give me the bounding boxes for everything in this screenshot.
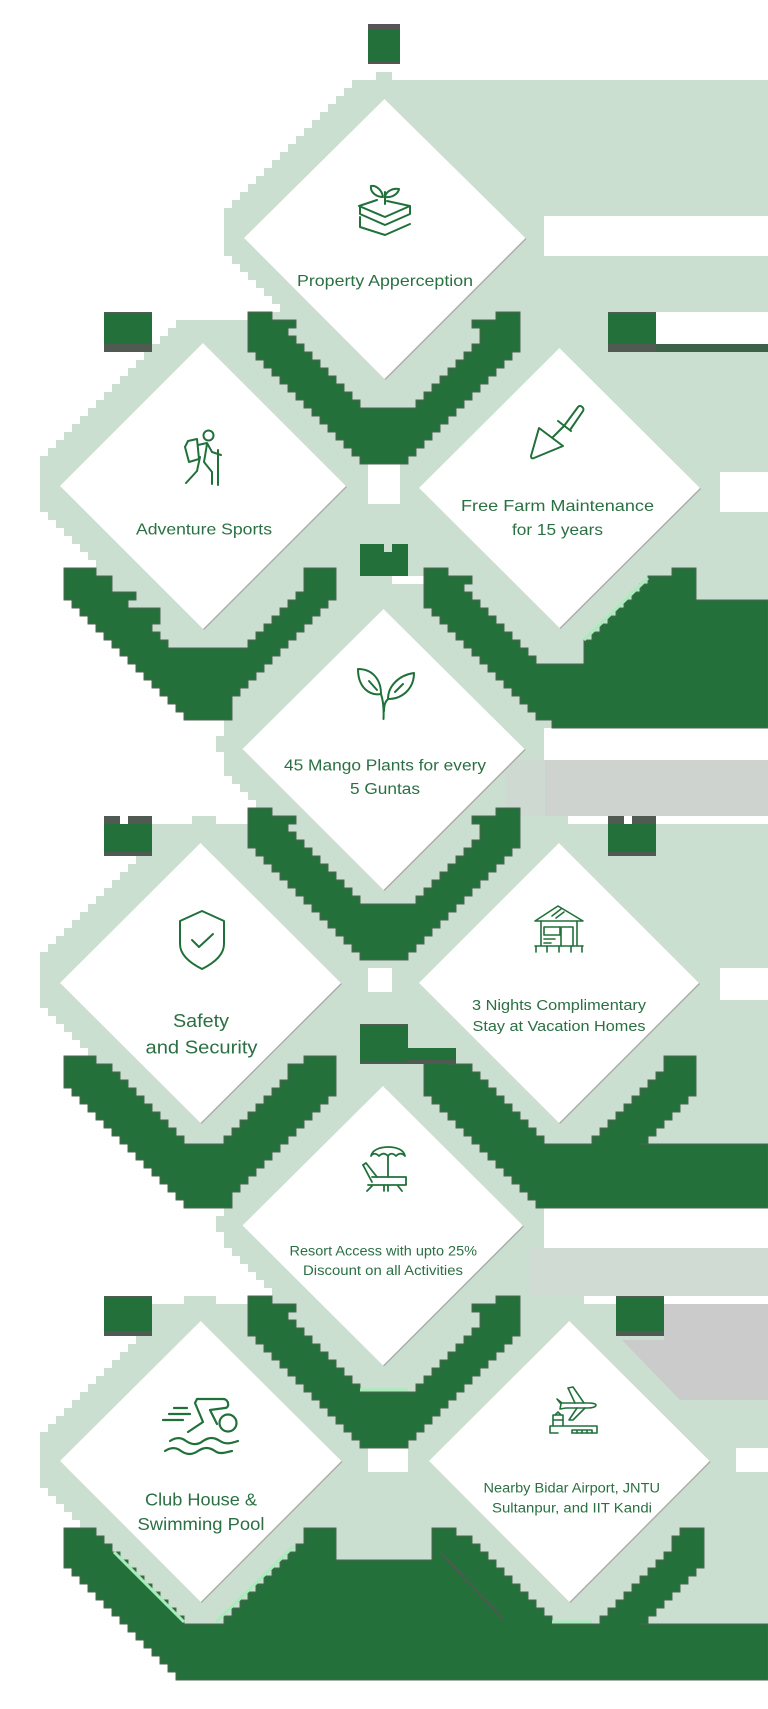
label: Resort Access with upto 25% xyxy=(290,1244,477,1258)
panel: adventure sports xyxy=(60,343,347,630)
connector square: row three center xyxy=(360,544,408,576)
chevron: below safety and security xyxy=(64,1056,336,1208)
label line two: Discount on all Activities xyxy=(303,1263,463,1278)
label: Club House & xyxy=(145,1490,257,1510)
white and grey horizontal bands xyxy=(368,216,768,1472)
label: 45 Mango Plants for every xyxy=(284,758,486,774)
bottom chevron edge line xyxy=(441,1553,504,1620)
icon: plant leaves xyxy=(358,669,414,719)
icon: sprout on soil layers xyxy=(359,186,410,235)
connector square: row six left xyxy=(104,1296,152,1336)
chevron: below property apperception xyxy=(248,312,520,464)
icon: hiker xyxy=(185,430,221,485)
icon: trowel xyxy=(531,406,583,458)
label line two: Sultanpur, and IIT Kandi xyxy=(492,1500,652,1516)
label line two: Swimming Pool xyxy=(138,1514,264,1534)
right side dark strip xyxy=(656,344,768,352)
chevron: below resort access xyxy=(248,1296,520,1448)
panel: nearby airport xyxy=(429,1321,711,1603)
connector square: row six right xyxy=(616,1296,664,1336)
bottom chevrons and dark band xyxy=(64,1528,768,1680)
icon: house xyxy=(535,906,583,952)
label: Free Farm Maintenance xyxy=(461,498,654,515)
icon: shield check xyxy=(180,911,224,969)
label: Nearby Bidar Airport, JNTU xyxy=(484,1480,660,1496)
connector square: row four right xyxy=(608,816,656,856)
label line two: for 15 years xyxy=(512,522,603,539)
top connector square xyxy=(368,24,400,64)
label: Safety xyxy=(173,1011,229,1031)
light green edge highlights xyxy=(114,578,648,1622)
icon: plane and airport xyxy=(550,1387,597,1433)
panel: resort access xyxy=(242,1086,524,1366)
panel: free farm maintenance xyxy=(419,348,701,629)
chevron: below adventure sports xyxy=(64,568,336,720)
label line two: 5 Guntas xyxy=(350,781,420,798)
chevron and dark band: below vacation homes xyxy=(424,1056,768,1208)
label: 3 Nights Complimentary xyxy=(472,998,647,1014)
panel: property apperception xyxy=(244,99,526,380)
chevron and dark band: below free farm maintenance xyxy=(424,568,768,728)
panel: safety and security xyxy=(60,843,342,1124)
label line two: Stay at Vacation Homes xyxy=(472,1019,646,1035)
chevron: below mango plants xyxy=(248,808,520,960)
label: Property Apperception xyxy=(297,273,473,290)
label line two: and Security xyxy=(146,1038,258,1058)
connector square: row five center xyxy=(360,1024,456,1064)
panel: club house and swimming pool xyxy=(60,1321,342,1603)
icon: swimmer xyxy=(163,1399,238,1454)
icon: umbrella and sun lounger xyxy=(363,1147,406,1191)
label: Adventure Sports xyxy=(136,522,272,538)
connector square: row four left xyxy=(104,816,152,856)
panel: mango plants xyxy=(242,609,526,891)
connector square: row two left xyxy=(104,312,152,352)
connector square: row two right xyxy=(608,312,656,352)
panel: vacation homes xyxy=(419,843,700,1124)
